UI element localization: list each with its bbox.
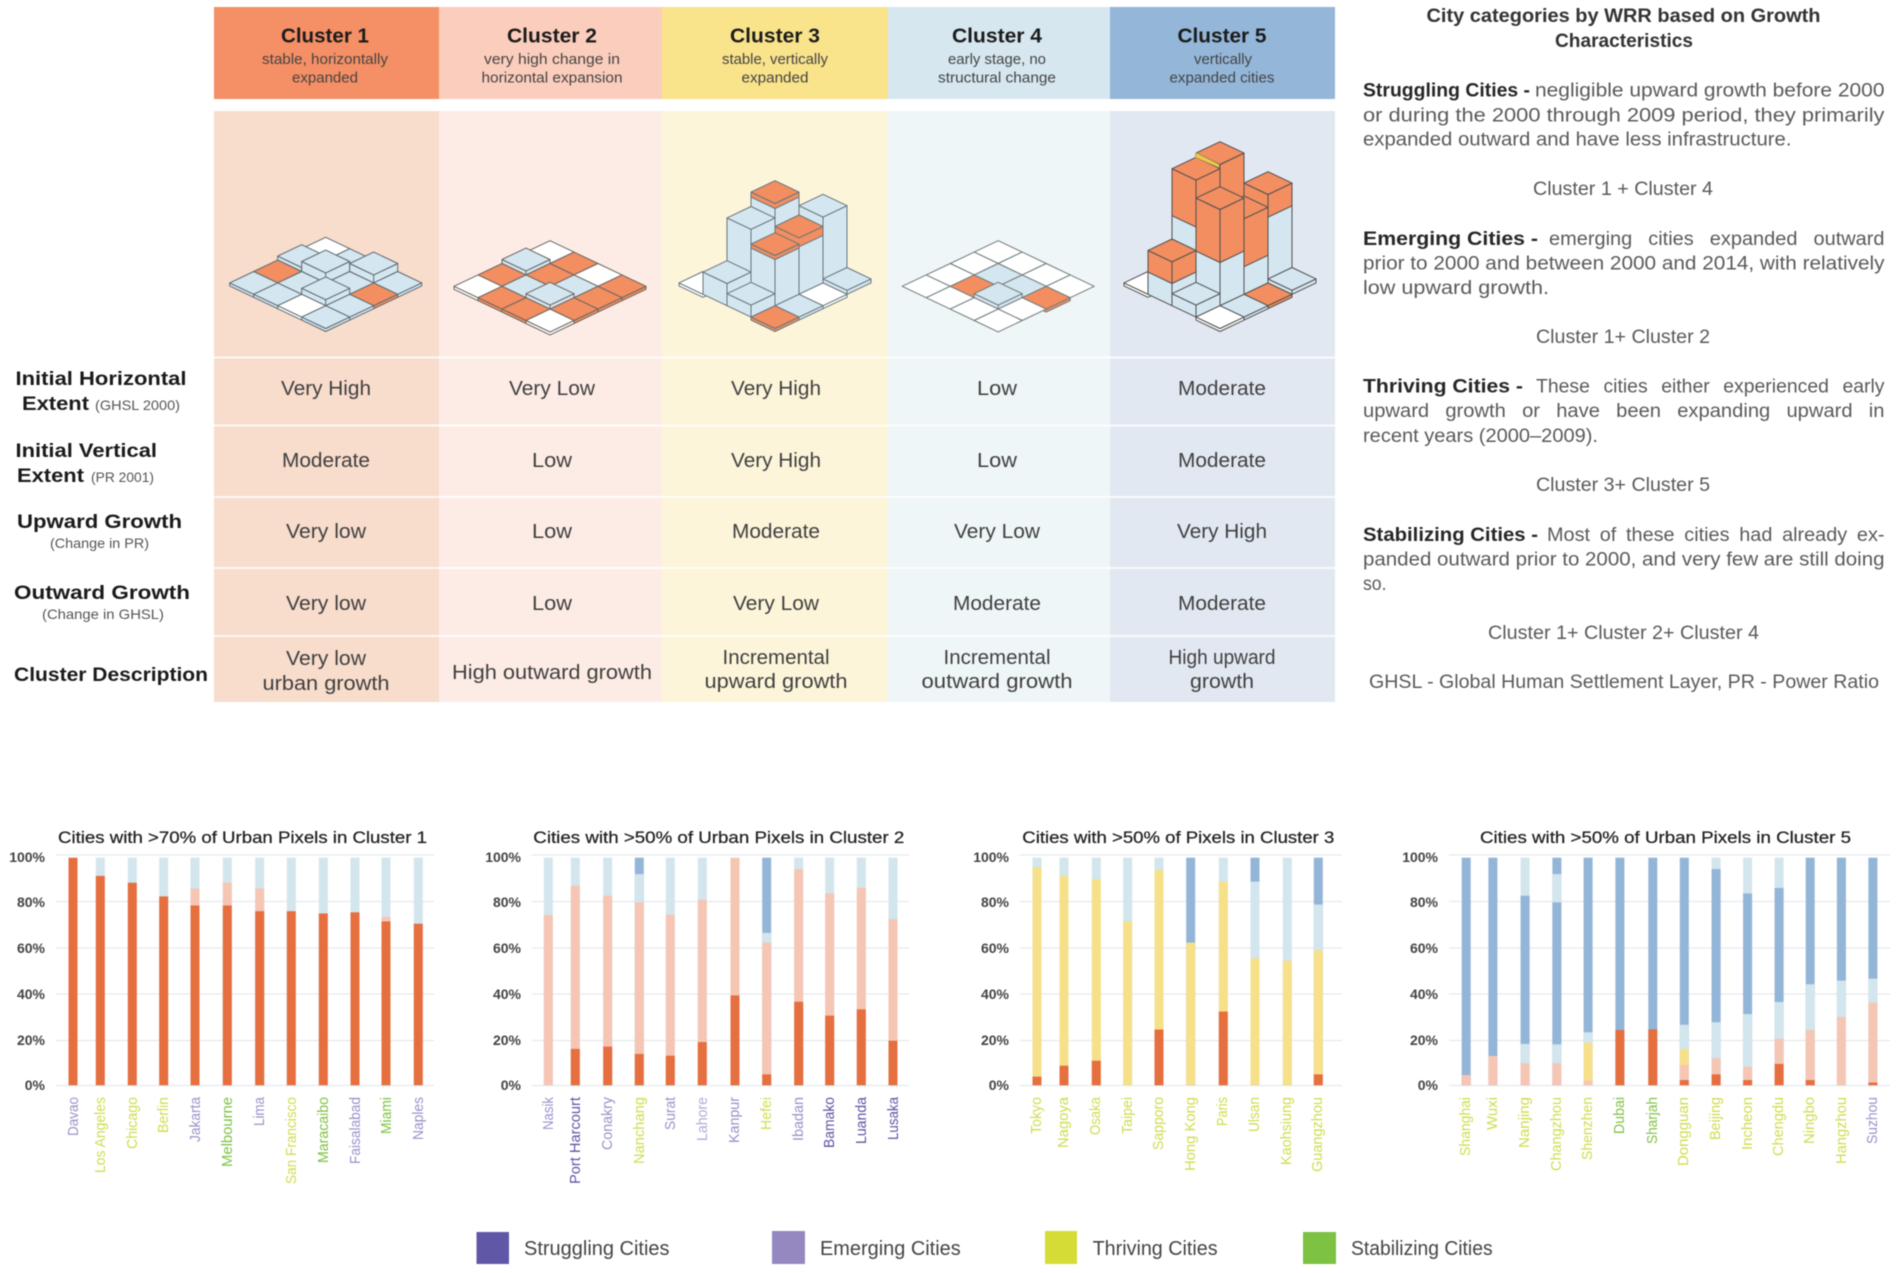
- city labels: Nanjing: [1516, 1097, 1533, 1148]
- city labels: Luanda: [853, 1096, 870, 1144]
- row: upward growth: Very low: [286, 521, 367, 543]
- city labels: Sapporo: [1150, 1097, 1167, 1150]
- y axis and grid: 40%: [981, 986, 1010, 1002]
- y axis and grid: 100%: [1402, 849, 1439, 865]
- row: initial vertical extent: Moderate: [1178, 450, 1266, 472]
- header: cluster 3: Cluster 3: [730, 26, 820, 48]
- city labels: Kaohsiung: [1278, 1097, 1295, 1165]
- chart title: Cities with >50% of Urban Pixels in Cluster 5: [1480, 828, 1851, 847]
- struggling cities description: Struggling Cities -: [1363, 80, 1530, 101]
- row: initial horizontal extent: (GHSL 2000): [95, 397, 180, 413]
- stacked bars: [1032, 858, 1323, 1085]
- city labels: Dongguan: [1675, 1097, 1692, 1166]
- row: cluster description: High upward: [1168, 647, 1276, 669]
- row: upward growth: Very Low: [954, 521, 1041, 543]
- y axis and grid: 0%: [1418, 1077, 1439, 1093]
- row: cluster description: Incremental: [944, 647, 1050, 669]
- y axis and grid: 80%: [493, 894, 522, 910]
- header: cluster 3: stable, vertically: [722, 51, 828, 68]
- city labels: Lahore: [694, 1097, 711, 1141]
- y axis and grid: 100%: [973, 849, 1010, 865]
- city labels: Surat: [662, 1096, 679, 1130]
- city labels: [1457, 1097, 1881, 1171]
- y axis and grid: [9, 849, 434, 1093]
- header: cluster 1: Cluster 1: [281, 26, 369, 48]
- city labels: Miami: [378, 1097, 395, 1134]
- struggling cities description: Cluster 1 + Cluster 4: [1533, 179, 1713, 200]
- emerging cities description: [1363, 229, 1885, 348]
- row: initial horizontal extent: Very High: [281, 378, 371, 400]
- header: cluster 1: expanded: [292, 70, 358, 86]
- city labels: Lima: [251, 1096, 268, 1126]
- city labels: Beijing: [1707, 1097, 1724, 1140]
- row: initial vertical extent: (PR 2001): [91, 469, 154, 485]
- panel heading: City categories by WRR based on Growth: [1426, 6, 1820, 27]
- city labels: Nagoya: [1055, 1096, 1072, 1148]
- city labels: Nasik: [540, 1097, 557, 1130]
- stabilizing cities description: [1363, 525, 1884, 644]
- city labels: Ningbo: [1801, 1097, 1818, 1144]
- header: cluster 1: [214, 7, 439, 99]
- isometric diagram: cluster 3: [679, 181, 871, 332]
- row: upward growth: (Change in PR): [50, 535, 149, 551]
- city labels: Port Harcourt: [567, 1096, 584, 1184]
- chart: cities in cluster 5: [1402, 828, 1890, 1171]
- header: cluster 3: expanded: [742, 70, 808, 86]
- y axis and grid: 60%: [493, 940, 522, 956]
- header: cluster 5: expanded cities: [1170, 70, 1274, 86]
- row: cluster description: [14, 647, 1276, 695]
- city labels: Maracaibo: [315, 1097, 332, 1163]
- city labels: Ibadan: [790, 1097, 807, 1141]
- legend: thriving cities: Thriving Cities: [1093, 1238, 1218, 1260]
- row: cluster description: growth: [1190, 671, 1254, 693]
- row: cluster description: High outward growth: [452, 662, 652, 684]
- chart: cities in cluster 2: [485, 828, 909, 1184]
- y axis and grid: 100%: [485, 849, 522, 865]
- row: upward growth: Upward Growth: [17, 512, 182, 533]
- stacked bars: [68, 858, 423, 1085]
- header: cluster 2: horizontal expansion: [482, 70, 622, 86]
- city labels: Chengdu: [1770, 1097, 1787, 1156]
- city labels: Davao: [65, 1097, 82, 1136]
- y axis and grid: 60%: [1410, 940, 1439, 956]
- city labels: [65, 1096, 427, 1184]
- row: outward growth: Moderate: [953, 593, 1041, 615]
- y axis and grid: 80%: [981, 894, 1010, 910]
- struggling cities description: or during the 2000 through 2009 period, they primarily: [1363, 106, 1885, 127]
- row: cluster description: Very low: [286, 648, 367, 670]
- row: cluster description: Cluster Description: [14, 665, 208, 686]
- city labels: Hong Kong: [1182, 1097, 1199, 1171]
- city labels: Wuxi: [1484, 1097, 1501, 1130]
- city labels: San Francisco: [283, 1097, 300, 1184]
- header: cluster 4: structural change: [938, 70, 1056, 86]
- row: initial horizontal extent: Very Low: [509, 378, 596, 400]
- legend: thriving cities: [1045, 1231, 1218, 1264]
- row: cluster description: upward growth: [704, 671, 848, 693]
- city labels: Changzhou: [1548, 1097, 1565, 1171]
- chart: cities in cluster 1: [9, 828, 434, 1184]
- abbreviations note: GHSL - Global Human Settlement Layer, PR - Power Ratio: [1369, 672, 1879, 693]
- city labels: Lusaka: [885, 1096, 902, 1140]
- y axis and grid: 20%: [1410, 1032, 1439, 1048]
- row: initial vertical extent: Extent: [17, 466, 85, 487]
- emerging cities description: Cluster 1+ Cluster 2: [1536, 327, 1710, 348]
- isometric diagram: cluster 5: [1124, 142, 1316, 332]
- city labels: Incheon: [1739, 1097, 1756, 1150]
- header: cluster 5: vertically: [1194, 51, 1252, 68]
- column backgrounds: [214, 111, 1335, 702]
- struggling cities description: [1363, 80, 1885, 200]
- city labels: Jakarta: [187, 1096, 204, 1142]
- row: initial horizontal extent: Moderate: [1178, 378, 1266, 400]
- emerging cities description: low upward growth.: [1363, 278, 1549, 299]
- y axis and grid: 100%: [9, 849, 46, 865]
- city labels: Ulsan: [1246, 1097, 1263, 1132]
- city labels: Paris: [1214, 1097, 1231, 1126]
- y axis and grid: 60%: [17, 940, 46, 956]
- struggling cities description: expanded outward and have less infrastructure.: [1363, 130, 1792, 150]
- city labels: Suzhou: [1864, 1097, 1881, 1144]
- y axis and grid: 0%: [25, 1077, 46, 1093]
- row: upward growth: [17, 512, 1267, 551]
- stacked bars: [544, 858, 898, 1085]
- isometric diagram: cluster 2: [454, 241, 646, 335]
- city labels: Berlin: [155, 1097, 172, 1133]
- y axis and grid: 20%: [493, 1032, 522, 1048]
- city labels: Tokyo: [1028, 1097, 1045, 1134]
- city labels: Chicago: [124, 1097, 141, 1149]
- chart: cities in cluster 3: [973, 828, 1342, 1172]
- panel heading: Characteristics: [1555, 31, 1693, 52]
- row: upward growth: Very High: [1177, 521, 1267, 543]
- y axis and grid: [485, 849, 909, 1093]
- row: outward growth: Moderate: [1178, 593, 1266, 615]
- header: cluster 4: Cluster 4: [952, 26, 1043, 48]
- row: initial vertical extent: Very High: [731, 450, 821, 472]
- legend: emerging cities: Emerging Cities: [820, 1238, 961, 1260]
- header: cluster 5: [1110, 7, 1335, 99]
- row: initial vertical extent: [16, 441, 1266, 487]
- city labels: Naples: [410, 1097, 427, 1140]
- y axis and grid: [1402, 849, 1890, 1093]
- cluster table: [14, 7, 1335, 702]
- stabilizing cities description: Most of these cities had already ex-: [1547, 525, 1884, 546]
- chart title: Cities with >70% of Urban Pixels in Cluster 1: [58, 828, 427, 847]
- stabilizing cities description: Cluster 1+ Cluster 2+ Cluster 4: [1488, 623, 1759, 644]
- y axis and grid: [973, 849, 1342, 1093]
- city labels: Guangzhou: [1309, 1097, 1326, 1172]
- header: cluster 5: Cluster 5: [1178, 26, 1266, 48]
- city labels: Bamako: [821, 1097, 838, 1148]
- legend: [476, 1231, 1493, 1264]
- thriving cities description: Cluster 3+ Cluster 5: [1536, 475, 1710, 496]
- row: initial vertical extent: Moderate: [282, 450, 370, 472]
- city labels: Hangzhou: [1833, 1097, 1850, 1164]
- legend: stabilizing cities: Stabilizing Cities: [1351, 1238, 1493, 1260]
- city labels: Shanghai: [1457, 1097, 1474, 1156]
- y axis and grid: 40%: [493, 986, 522, 1002]
- chart title: Cities with >50% of Pixels in Cluster 3: [1022, 828, 1334, 847]
- city labels: Los Angeles: [92, 1097, 109, 1173]
- row: outward growth: (Change in GHSL): [42, 606, 164, 622]
- city labels: [1028, 1096, 1326, 1172]
- thriving cities description: upward growth or have been expanding upward in: [1363, 401, 1884, 422]
- y axis and grid: 0%: [501, 1077, 522, 1093]
- y axis and grid: 60%: [981, 940, 1010, 956]
- row: outward growth: Very low: [286, 593, 367, 615]
- row: outward growth: Very Low: [733, 593, 820, 615]
- legend: emerging cities: [772, 1231, 961, 1264]
- city labels: Faisalabad: [347, 1097, 364, 1164]
- panel heading: [1426, 6, 1820, 52]
- stacked bars: [1462, 858, 1877, 1085]
- header: cluster 4: early stage, no: [948, 51, 1046, 68]
- city labels: Melbourne: [219, 1097, 236, 1167]
- isometric diagram: cluster 4: [902, 241, 1094, 332]
- row: initial horizontal extent: Extent: [22, 394, 90, 415]
- y axis and grid: 20%: [981, 1032, 1010, 1048]
- y axis and grid: 80%: [1410, 894, 1439, 910]
- city labels: Conakry: [599, 1097, 616, 1150]
- isometric diagram: cluster 1: [230, 237, 422, 332]
- row: initial horizontal extent: Initial Horizontal: [16, 369, 186, 390]
- row: upward growth: Moderate: [732, 521, 820, 543]
- legend: stabilizing cities: [1303, 1232, 1493, 1264]
- row: initial vertical extent: Initial Vertical: [16, 441, 157, 462]
- emerging cities description: emerging cities expanded outward: [1549, 229, 1884, 250]
- thriving cities description: These cities either experienced early: [1536, 376, 1885, 398]
- row: initial horizontal extent: [16, 369, 1266, 415]
- city labels: Hefei: [758, 1097, 775, 1130]
- header: cluster 1: stable, horizontally: [262, 51, 389, 68]
- thriving cities description: Thriving Cities -: [1363, 376, 1523, 398]
- row: cluster description: urban growth: [262, 673, 390, 695]
- header: cluster 3: [662, 7, 888, 99]
- city labels: Kanpur: [726, 1097, 743, 1143]
- y axis and grid: 80%: [17, 894, 46, 910]
- city labels: Osaka: [1087, 1096, 1104, 1135]
- stabilizing cities description: panded outward prior to 2000, and very few are still doing: [1363, 550, 1884, 571]
- row: upward growth: Low: [532, 521, 573, 543]
- row: cluster description: outward growth: [922, 671, 1072, 693]
- legend: struggling cities: [476, 1232, 670, 1264]
- header: cluster 2: very high change in: [484, 51, 620, 68]
- row: outward growth: Low: [532, 593, 573, 615]
- row: initial vertical extent: Low: [977, 450, 1018, 472]
- text panel: city categories: [1363, 6, 1885, 693]
- y axis and grid: 40%: [17, 986, 46, 1002]
- struggling cities description: negligible upward growth before 2000: [1535, 80, 1884, 101]
- header: cluster 2: [439, 7, 662, 99]
- stabilizing cities description: so.: [1363, 574, 1386, 595]
- row: outward growth: Outward Growth: [14, 583, 190, 604]
- header: cluster 2: Cluster 2: [507, 26, 597, 48]
- city labels: Dubai: [1611, 1097, 1628, 1134]
- row: outward growth: [14, 583, 1266, 622]
- thriving cities description: recent years (2000–2009).: [1363, 426, 1598, 447]
- header: cluster 4: [888, 7, 1110, 99]
- row: cluster description: Incremental: [722, 647, 830, 669]
- city labels: Sharjah: [1644, 1097, 1661, 1144]
- thriving cities description: [1363, 376, 1885, 496]
- chart title: Cities with >50% of Urban Pixels in Cluster 2: [533, 828, 904, 847]
- city labels: Shenzhen: [1579, 1097, 1596, 1160]
- city labels: Taipei: [1119, 1097, 1136, 1134]
- y axis and grid: 0%: [989, 1077, 1010, 1093]
- row: initial vertical extent: Low: [532, 450, 573, 472]
- row: initial horizontal extent: Low: [977, 378, 1018, 400]
- stabilizing cities description: Stabilizing Cities -: [1363, 525, 1538, 546]
- city labels: Nanchang: [631, 1097, 648, 1164]
- emerging cities description: Emerging Cities -: [1363, 229, 1538, 250]
- y axis and grid: 20%: [17, 1032, 46, 1048]
- row: initial horizontal extent: Very High: [731, 378, 821, 400]
- emerging cities description: prior to 2000 and between 2000 and 2014, with relatively: [1363, 254, 1885, 274]
- legend: struggling cities: Struggling Cities: [524, 1238, 670, 1260]
- city labels: [540, 1096, 902, 1184]
- y axis and grid: 40%: [1410, 986, 1439, 1002]
